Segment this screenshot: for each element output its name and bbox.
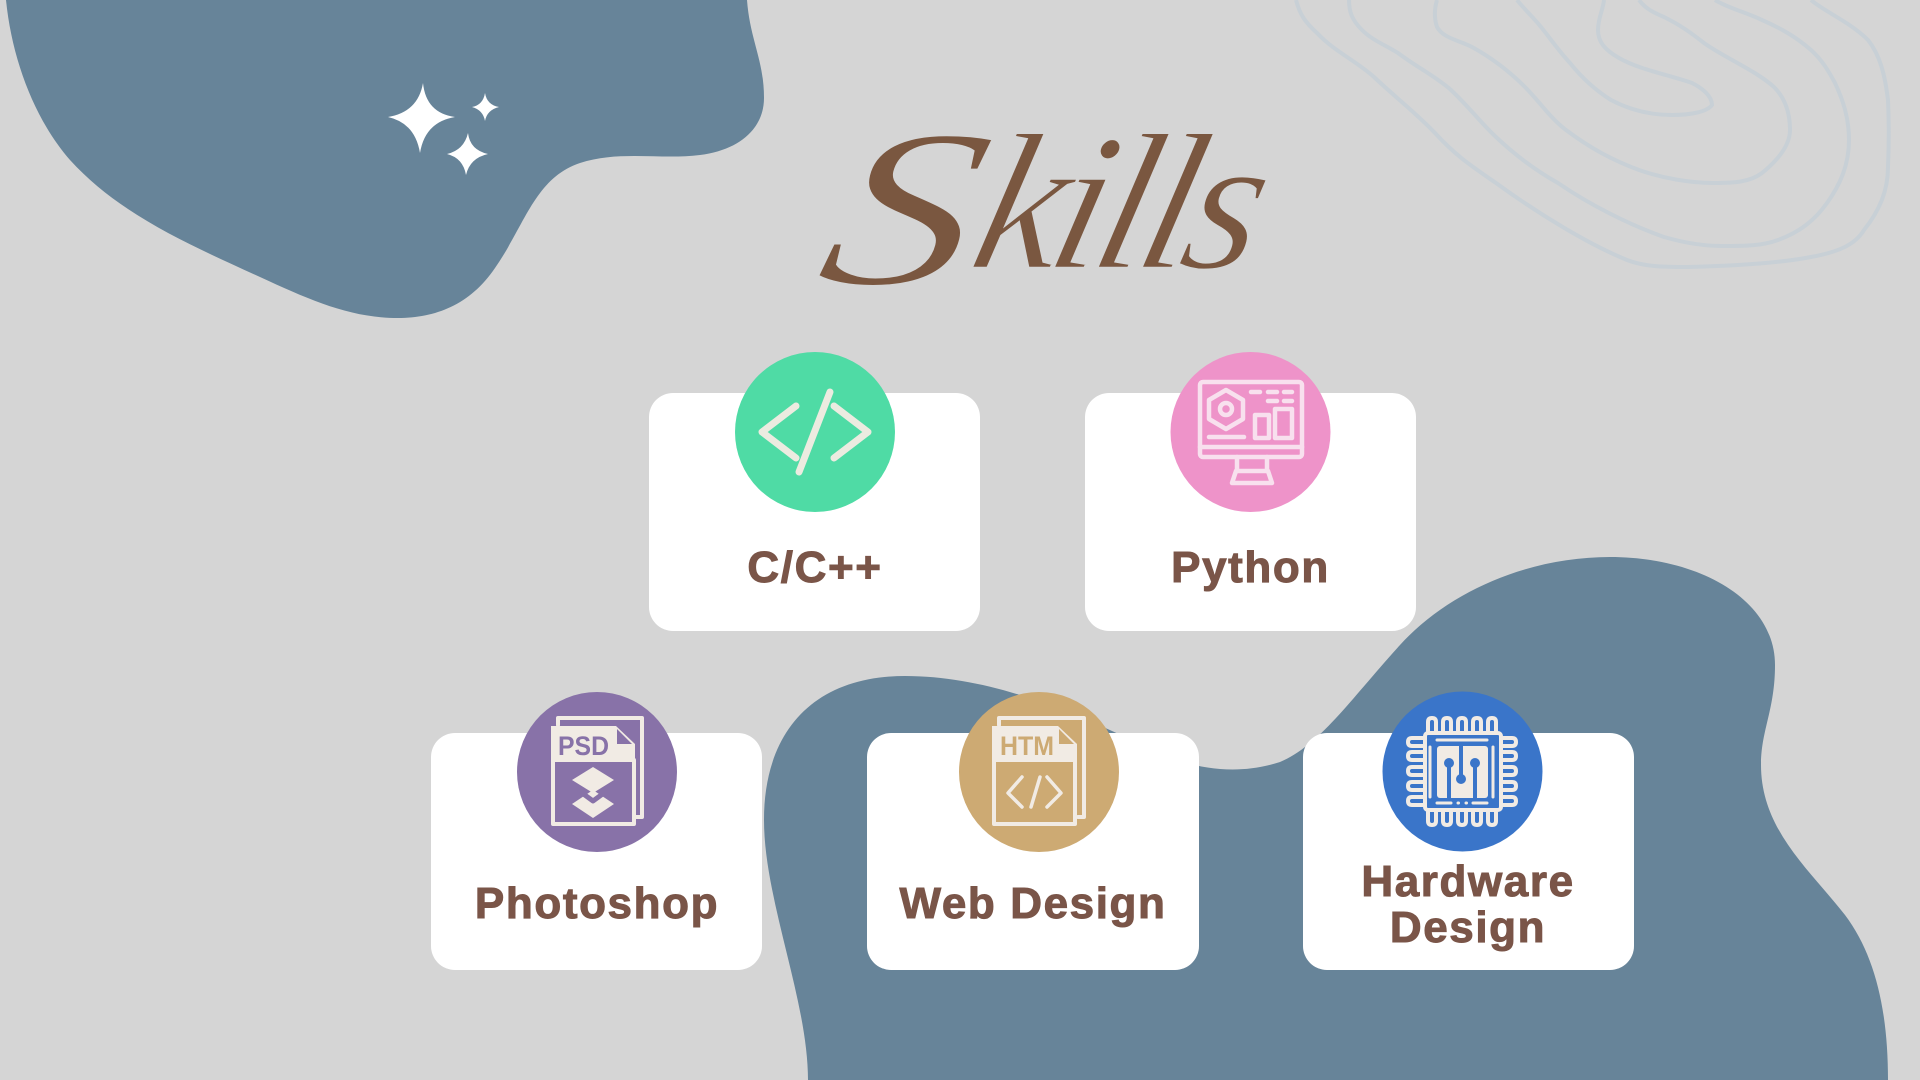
label: Python: Python [1171, 543, 1330, 592]
title: S [800, 84, 1012, 333]
label: Photoshop: Photoshop [475, 879, 719, 928]
card background: Hardware Design [1303, 733, 1634, 970]
icon circle: microchip [1382, 692, 1542, 852]
blob: bottom-right background shape [764, 557, 1888, 1080]
card background: C/C++ [649, 393, 980, 631]
icon: sparkles [388, 83, 499, 175]
icon circle: monitor dashboard [1170, 352, 1330, 512]
blob: top-left background shape [6, 0, 764, 318]
icon circle: HTM file [959, 692, 1119, 852]
card: Python [1085, 352, 1416, 631]
label: C/C++: C/C++ [747, 543, 883, 592]
card: C/C++ [649, 352, 980, 631]
card background: Web Design [867, 733, 1199, 970]
icon circle: HTM file: HTM [1000, 731, 1054, 761]
label: Web Design: Web Design [899, 879, 1167, 928]
card: Hardware Design [1303, 692, 1634, 970]
card: Photoshop [431, 692, 762, 970]
label: Hardware Design: Hardware [1361, 857, 1575, 906]
label: Hardware Design: Design [1390, 903, 1546, 952]
card background: Python [1085, 393, 1416, 631]
icon circle: code brackets [735, 352, 895, 512]
card background: Photoshop [431, 733, 762, 970]
card: Web Design [867, 692, 1199, 970]
contour lines decoration [1296, 0, 1889, 267]
icon circle: PSD file [517, 692, 677, 852]
icon circle: PSD file: PSD [558, 731, 609, 761]
title: kills [955, 95, 1289, 310]
